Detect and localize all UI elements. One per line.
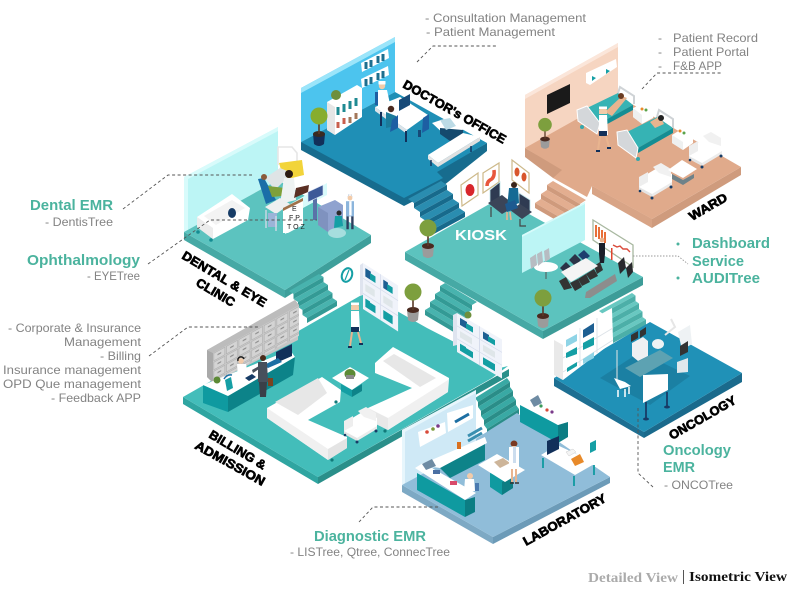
callout: doctor's office: - Patient Management (426, 25, 556, 39)
callout: diagnostic EMR: - LISTree, Qtree, ConnecTree (290, 545, 450, 559)
instrument cart (265, 198, 290, 231)
callout: oncology EMR (638, 408, 733, 492)
callout: ward: Patient Portal (673, 45, 749, 59)
callout: ward: - (658, 45, 662, 59)
clinic floor (184, 180, 371, 298)
eye sign and pole (308, 185, 323, 220)
reception desk (203, 344, 295, 412)
wall picture: heart (461, 173, 478, 206)
nurse (596, 106, 611, 151)
shelf (453, 312, 502, 379)
callout: ophthalmology (27, 220, 317, 283)
side table with chairs (530, 248, 558, 279)
callout: ward: Patient Record (673, 31, 758, 45)
callout: oncology EMR: - ONCOTree (664, 478, 733, 492)
callout: doctor's office (417, 11, 587, 62)
callout: billing and admission: Management (64, 335, 142, 349)
panel: dental and eye clinic room (184, 127, 371, 298)
bed (577, 87, 634, 134)
side table (432, 117, 463, 141)
nightstand (672, 127, 693, 150)
eye chart panel (283, 183, 327, 234)
filing cabinets (207, 300, 299, 383)
callout: dashboard service: Service (692, 253, 744, 270)
panel: kiosk (405, 160, 643, 339)
wall shelves (361, 49, 389, 88)
L-shaped sofa (368, 347, 449, 433)
L-shaped sofa (267, 377, 347, 462)
desk with monitor (541, 436, 596, 486)
dental chair with dentist and patient (258, 147, 309, 204)
room label: ward: WARD (686, 190, 730, 224)
wall shelf (447, 405, 473, 432)
anaesthesia machine (631, 327, 648, 361)
callout: ward: F&B APP (673, 59, 722, 73)
eye exam machine (318, 200, 343, 232)
clinic wall (184, 127, 278, 232)
callout: billing and admission: - Billing (100, 349, 141, 363)
panel: billing and admission (183, 263, 509, 484)
stairs: ward to kiosk (535, 181, 586, 227)
eye doctor and patient (328, 195, 354, 238)
TV (547, 84, 570, 114)
shelf (360, 263, 398, 332)
doctor at desk (375, 81, 429, 142)
callout: doctor's office: - Consultation Management (425, 11, 587, 25)
stairs: clinic to billing (289, 274, 337, 323)
callout: ward: - (658, 31, 662, 45)
callout: dental EMR: Dental EMR (30, 197, 113, 214)
kiosk label: KIOSK (455, 227, 507, 244)
front counter (415, 459, 476, 517)
plant (404, 284, 422, 322)
nurse walking (348, 302, 363, 347)
room label: doctor's office: DOCTOR's OFFICE (401, 77, 508, 147)
doctor's office floor (301, 92, 487, 206)
callout: billing and admission: Insurance management (3, 363, 142, 377)
lab wall (402, 390, 476, 485)
callout: dental EMR (30, 175, 252, 229)
callout: ophthalmology: Ophthalmology (27, 252, 141, 269)
eye chart panel: F P (289, 215, 300, 222)
center table (478, 454, 525, 495)
room label: oncology: ONCOLOGY (667, 393, 739, 443)
room label: billing and admission (193, 428, 269, 489)
presentation screen (593, 220, 633, 267)
plant (310, 108, 328, 146)
stairs: doctor's office to kiosk (408, 181, 465, 235)
ward floor (525, 96, 741, 228)
callout: billing and admission: - Corporate & Insurance (8, 321, 141, 335)
room label: billing and admission: ADMISSION (193, 438, 267, 489)
exam bed (428, 133, 480, 167)
callout: dental EMR: - DentisTree (45, 215, 113, 229)
kiosk floor (405, 198, 643, 339)
callout: diagnostic EMR (290, 507, 450, 559)
bookcase (327, 85, 362, 135)
wall picture: kidneys (512, 160, 529, 193)
billing floor (183, 293, 509, 484)
lab floor (402, 413, 610, 544)
businessman (252, 355, 273, 397)
wall shelf (418, 422, 446, 447)
surgical lights (652, 319, 675, 349)
IV stand and side table (614, 350, 631, 397)
room label: dental and eye clinic: DENTAL & EYE (179, 249, 269, 310)
eye chart panel: E (292, 206, 297, 213)
panel: laboratory (402, 390, 610, 544)
panel: doctor's office room (301, 37, 487, 206)
armchair (344, 407, 378, 444)
storage shelf (554, 308, 613, 380)
panel: ward room (525, 43, 741, 228)
floor shadows (600, 352, 690, 405)
stairs: billing to laboratory (475, 378, 519, 434)
coffee table (332, 367, 369, 397)
callout: diagnostic EMR: Diagnostic EMR (314, 528, 426, 545)
view switcher: Detailed View (588, 571, 679, 586)
presenter (599, 238, 612, 263)
callout: billing and admission: - Feedback APP (51, 391, 141, 405)
sofa with bag (196, 194, 250, 242)
right counter (518, 395, 568, 443)
coffee table (668, 160, 697, 185)
eye chart panel: T O Z (287, 224, 305, 231)
room label: dental and eye clinic: CLINIC (193, 276, 238, 310)
callout: billing and admission: OPD Que management (3, 377, 142, 391)
panel: oncology room (554, 308, 742, 438)
room label: laboratory: LABORATORY (521, 491, 609, 549)
back counter (420, 428, 487, 478)
conference table with attendees (559, 250, 633, 291)
receptionist (237, 357, 248, 380)
stairs: kiosk to billing (425, 283, 477, 334)
callout: billing and admission (3, 321, 258, 405)
callout: oncology EMR: Oncology (663, 442, 732, 459)
plant (420, 220, 436, 258)
instrument board (643, 374, 670, 420)
equipment rack (677, 325, 692, 373)
plant (534, 290, 552, 328)
stairs: kiosk to oncology (599, 293, 646, 343)
lab doctor (509, 440, 519, 483)
callout: ward: - (658, 59, 662, 73)
armchair (689, 132, 722, 168)
operating table (625, 350, 673, 377)
oncology floor (554, 322, 742, 438)
waiting chairs with visitor (488, 182, 532, 226)
compass logo (340, 267, 354, 283)
callout: dashboard service (633, 235, 770, 287)
bed (617, 110, 673, 161)
lab technician (464, 473, 479, 491)
room label: billing and admission: BILLING & (206, 428, 269, 472)
wall picture: stomach (483, 163, 499, 193)
nightstand (633, 102, 655, 124)
callout: oncology EMR: EMR (663, 459, 695, 476)
view switcher (588, 570, 788, 586)
wall shelf (586, 59, 617, 85)
callout: dashboard service: AUDITree (692, 270, 760, 287)
conference wall (522, 202, 585, 273)
doctor's office wall (301, 37, 395, 142)
callout: ward (642, 31, 758, 89)
plant (538, 118, 552, 149)
armchair (639, 163, 672, 200)
callout: dashboard service: Dashboard (692, 235, 770, 252)
callout: ophthalmology: - EYETree (87, 269, 140, 283)
ward wall (525, 43, 618, 148)
row of chairs (585, 274, 617, 298)
view switcher: Isometric View (689, 570, 788, 585)
